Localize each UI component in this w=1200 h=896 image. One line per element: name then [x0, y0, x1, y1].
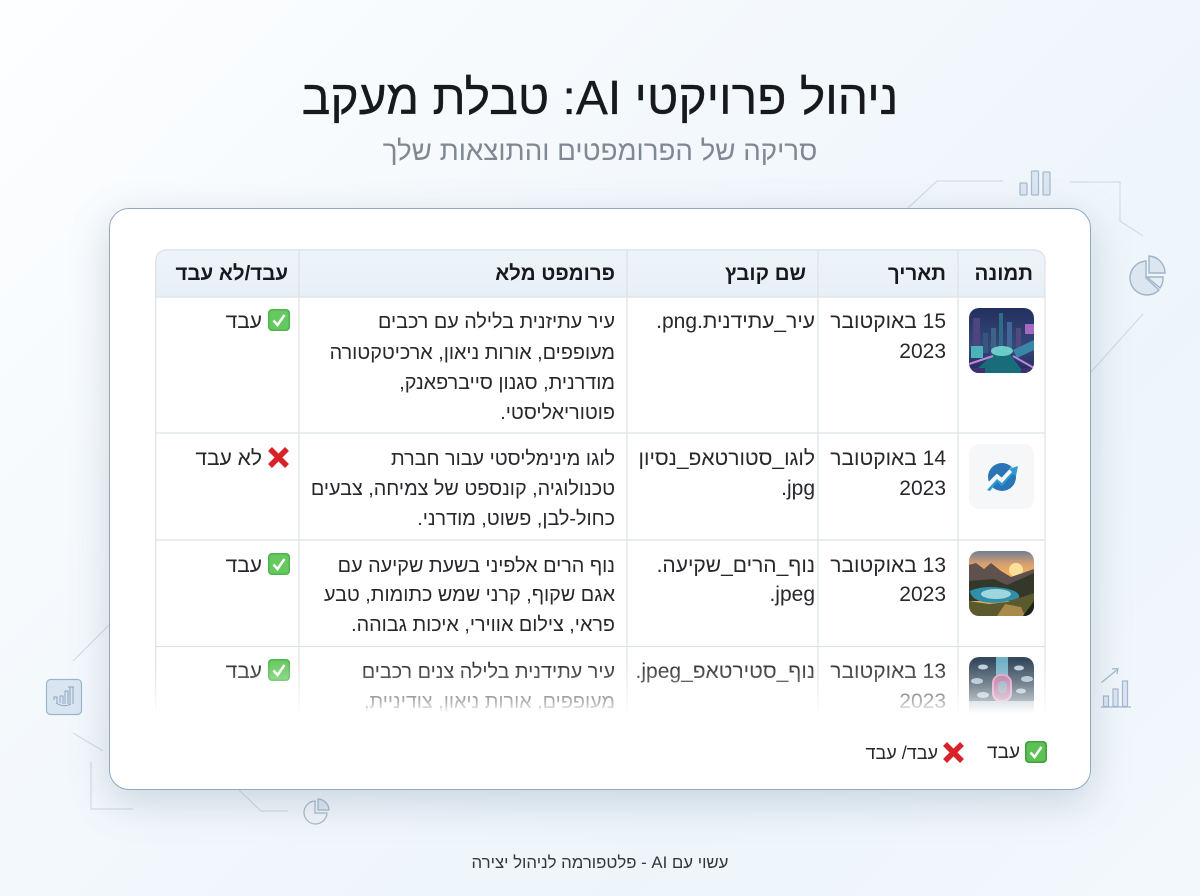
table grid [155, 250, 1046, 706]
row 2: jpg. [781, 477, 815, 500]
table header background [155, 249, 1045, 297]
legend [866, 741, 1047, 763]
status: did not work: לא עבד [195, 447, 262, 470]
row 1: 2023 [899, 340, 946, 363]
row 3: אגם שקוף, קרני שמש כתומות, טבע [324, 584, 615, 606]
prompt cell: עיר עתיזנית בלילה עם רכבים [378, 311, 615, 333]
thumbnail: startup landscape [969, 657, 1034, 710]
row 1: מודרנית, סגנון סייברפאנק, [399, 372, 615, 394]
date cell: 13 באוקטובר [830, 660, 946, 683]
legend: worked [1025, 741, 1047, 763]
legend: did not work [943, 742, 964, 763]
row 2: טכנולוגיה, קונספט של צמיחה, צבעים [311, 478, 615, 500]
table bottom fade [150, 660, 1050, 716]
icon: right growth bars [1101, 668, 1131, 707]
thumbnail: startup logo [969, 444, 1034, 509]
status: worked: עבד [226, 310, 262, 333]
status: worked [226, 309, 290, 333]
date cell: 13 באוקטובר [830, 554, 946, 577]
title: ניהול פרויקטי AI: טבלת מעקב [302, 72, 898, 125]
legend: עבד [987, 742, 1020, 763]
row 2 [195, 444, 1034, 530]
table [155, 249, 1046, 706]
prompt cell: נוף הרים אלפיני בשעת שקיעה עם [338, 555, 615, 577]
prompt cell: עיר עתידנית בלילה צנים רכבים [362, 661, 615, 683]
file name cell: נוף_הרים_שקיעה. [657, 554, 815, 577]
status: worked: עבד [226, 554, 262, 577]
icon: bottom pie chart [304, 799, 329, 824]
row 4: מעופפים, אורות ניאון, צודיניית, [364, 691, 615, 713]
prompt cell: לוגו מינימליסטי עבור חברת [391, 448, 615, 470]
footer: עשוי עם AI - פלטפורמה לניהול יצירה [472, 853, 728, 872]
status: worked [226, 553, 290, 577]
row 3: פראי, צילום אווירי, איכות גבוהה. [351, 614, 615, 636]
date cell: 15 באוקטובר [830, 310, 946, 333]
file name cell: לוגו_סטורטאפ_נסיון [639, 447, 815, 470]
header: status: עבד/לא עבד [175, 262, 288, 285]
row 1 [226, 308, 1034, 424]
row 3 [226, 551, 1034, 636]
file name cell: עיר_עתידנית.png. [656, 310, 815, 333]
row 2: 2023 [899, 477, 946, 500]
icon: top bar chart [1020, 171, 1050, 195]
row 3: jpeg. [769, 583, 815, 606]
row 4: 2023 [899, 690, 946, 713]
subtitle: סריקה של הפרומפטים והתוצאות שלך [383, 135, 817, 166]
row 1: מעופפים, אורות ניאון, ארכיטקטורה [330, 342, 615, 364]
header: date: תאריך [888, 262, 946, 285]
row 1: פוטוריאליסטי. [500, 402, 615, 424]
header: image: תמונה [975, 262, 1033, 285]
icon: right pie chart [1130, 256, 1165, 295]
row 3: 2023 [899, 583, 946, 606]
status: worked [226, 659, 290, 683]
row 2: כחול-לבן, פשוט, מודרני. [417, 508, 615, 530]
thumbnail: mountain sunset [969, 551, 1034, 616]
header: full prompt: פרומפט מלא [495, 262, 615, 285]
header: file name: שם קובץ [725, 262, 806, 285]
file name cell: נוף_סטירטאפ_jpeg. [636, 660, 815, 683]
column headers [175, 262, 1033, 285]
thumbnail: futuristic city [969, 308, 1034, 373]
date cell: 14 באוקטובר [830, 447, 946, 470]
panel: tracking table card [109, 208, 1091, 790]
status: worked: עבד [226, 660, 262, 683]
row 4 [226, 657, 1034, 713]
legend: עבד/ עבד [866, 743, 938, 763]
icon: left chart tile [46, 680, 82, 714]
